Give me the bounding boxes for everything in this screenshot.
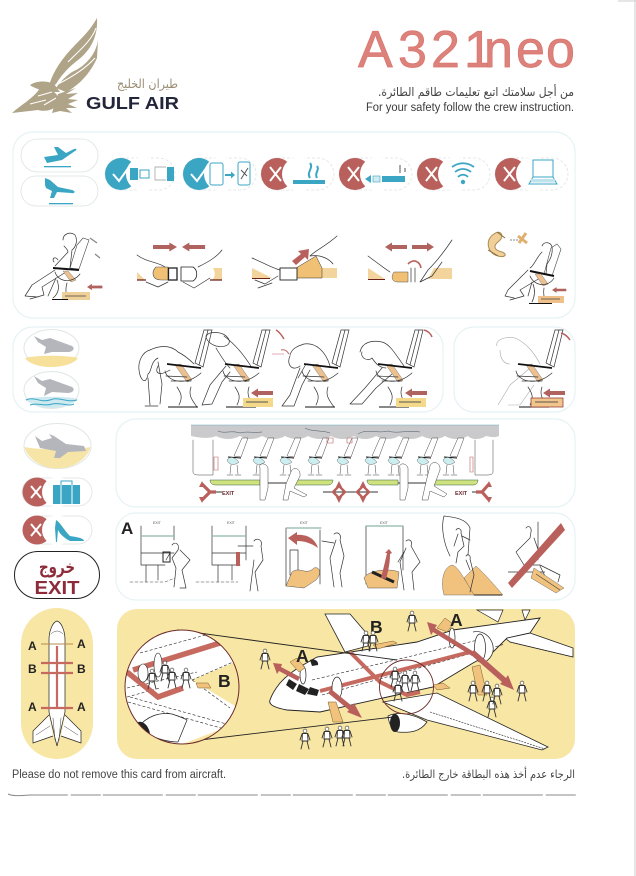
- plane upper wing: [325, 614, 368, 652]
- icon: crash on water: [24, 372, 79, 408]
- cockpit windows: [286, 679, 319, 696]
- doors open: [300, 628, 493, 699]
- step 3 door open: EXIT: [300, 521, 309, 525]
- exit labels: [28, 637, 86, 714]
- panel: aircraft evacuation illustration: [117, 609, 575, 759]
- slides: [290, 618, 487, 722]
- cabin windows dashed: [312, 640, 505, 695]
- footer: english note: Please do not remove this card from aircraft.: [12, 769, 226, 781]
- exit arrows left: [199, 481, 235, 503]
- illustration: buckle fasten: [137, 242, 222, 288]
- step 6 do not jump: [508, 522, 565, 593]
- panel: aircraft exit map: [21, 608, 93, 759]
- exit labels: A: [77, 637, 86, 651]
- smoke lines: [218, 428, 420, 434]
- panel: evacuation aisle: [116, 419, 575, 507]
- illustration: brace position woman: [139, 330, 212, 407]
- icon: no electronic cigarette: [339, 157, 412, 191]
- section labels: A: [296, 646, 309, 666]
- exit labels: B: [28, 662, 37, 676]
- exit arrows: [273, 622, 514, 718]
- icon: evacuation plane on ground: [24, 424, 91, 468]
- section labels: B: [370, 617, 383, 637]
- step 4 slide deploy: EXIT: [380, 521, 389, 525]
- icon: no smoking: [261, 157, 334, 191]
- engine: [388, 714, 427, 732]
- magnifier lens: [125, 630, 245, 750]
- magnifier connector lines: [175, 630, 397, 743]
- icon: no luggage: [22, 477, 92, 507]
- exit arrows right: EXIT: [455, 491, 468, 497]
- panel: brace positions: [13, 327, 443, 412]
- step 2 door: [196, 521, 263, 591]
- seat row markers: [214, 438, 473, 472]
- english safety instruction: For your safety follow the crew instruction.: [366, 100, 574, 114]
- icon: takeoff: [21, 139, 98, 172]
- illustration: fasten seat position: [25, 233, 102, 300]
- arabic wordmark: طيران الخليج: [117, 76, 178, 92]
- plane tail fins: [477, 610, 530, 622]
- footer: arabic note: الرجاء عدم أخذ هذه البطاقة خارج الطائرة.‏: [402, 766, 575, 782]
- evacuating passengers: [260, 611, 527, 749]
- icon: phone flight mode: [183, 157, 256, 191]
- exit arrows left: EXIT: [222, 491, 235, 497]
- seatback: [544, 244, 561, 276]
- icon: falcon: [12, 18, 98, 113]
- illustration: brace faded figure: [497, 330, 570, 407]
- lens label: B: [218, 671, 231, 691]
- step 5 slide evacuation: [442, 516, 503, 595]
- card bottom edge: [8, 794, 576, 796]
- illustration: brace position child: [272, 330, 349, 407]
- section labels: A: [450, 610, 463, 630]
- stabiliser: [505, 633, 573, 657]
- step 1 door: [130, 521, 190, 588]
- exit labels: A: [28, 639, 37, 653]
- badge: exit: EXIT: [34, 578, 80, 598]
- illustration: brace position pregnant: [350, 330, 427, 407]
- badge: exit: [14, 552, 100, 598]
- step 1 door: EXIT: [153, 521, 162, 525]
- row of seats: [227, 438, 464, 475]
- aisle routes: [320, 652, 470, 695]
- passengers walking in aisle: [260, 463, 447, 500]
- step 2 door: EXIT: [227, 521, 236, 525]
- icon: no laptop: [495, 157, 568, 191]
- illustration: brace position adult: [202, 330, 273, 407]
- icon: no wifi: [417, 157, 490, 191]
- section labels: [296, 610, 463, 666]
- passenger: [25, 233, 76, 299]
- panel: door operation type A: [116, 513, 575, 600]
- title: A321neo: A321neo: [358, 21, 575, 79]
- plane main wing lower: [383, 693, 548, 750]
- icon: crash on land: [24, 330, 79, 367]
- scan edge mark: [618, 0, 636, 876]
- logo: Gulf Air falcon and wordmark: [12, 18, 179, 113]
- exit routes: [41, 644, 73, 708]
- exit labels: A: [28, 700, 37, 714]
- icon: no high heels: [22, 515, 92, 545]
- exit arrows right: [455, 481, 492, 503]
- exit labels: B: [77, 662, 86, 676]
- panel: brace with seatbelt reminder: [454, 327, 575, 412]
- arabic safety instruction: من أجل سلامتك اتبع تعليمات طاقم الطائرة.‏: [378, 84, 574, 100]
- icon: seat belt on: [105, 157, 175, 191]
- fuselage: [270, 618, 540, 712]
- panel: takeoff and landing rules: [13, 132, 575, 318]
- latin wordmark: GULF AIR: [86, 93, 179, 113]
- step 3 door open: [286, 521, 344, 588]
- cabin ceiling with smoke: [191, 425, 499, 439]
- falcon feather highlights: [30, 28, 97, 105]
- illustration: buckle release: [368, 240, 452, 282]
- aisle floor lighting: [210, 480, 478, 485]
- step 4 slide deploy: [364, 521, 420, 590]
- mini plane outline: [33, 621, 81, 746]
- label A: A: [121, 519, 133, 538]
- cabin walls: [193, 440, 493, 475]
- arrows: seat back upright: [276, 330, 432, 339]
- badge: exit: خروج: [39, 557, 75, 578]
- lifejacket: [488, 232, 505, 257]
- seatback: [70, 238, 89, 269]
- exit arrows centre: [333, 481, 369, 503]
- passenger: [505, 243, 552, 300]
- illustration: adjust seat and lifejacket: [488, 232, 566, 304]
- illustration: buckle tighten: [252, 236, 337, 288]
- magnifier small circle: [380, 660, 434, 714]
- icon: landing: [21, 176, 98, 206]
- exit labels: A: [77, 700, 86, 714]
